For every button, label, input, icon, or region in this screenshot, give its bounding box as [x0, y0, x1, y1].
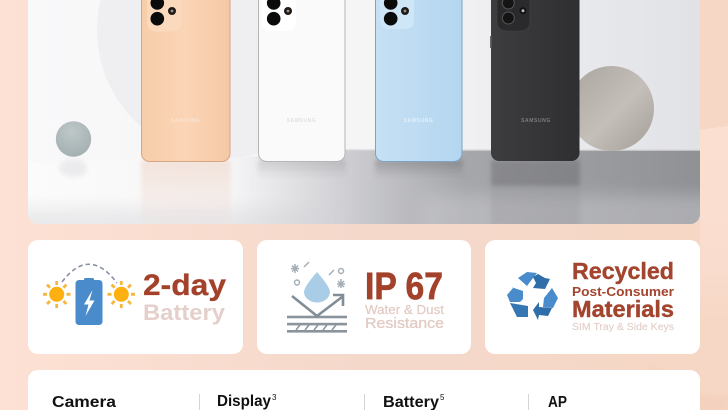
icon: water and dust resistance	[287, 262, 347, 333]
phone: black: SAMSUNG	[521, 118, 551, 124]
heading: IP 67: IP 67	[365, 266, 443, 308]
floor reflections	[141, 160, 580, 226]
floor	[28, 150, 700, 224]
footnote 5: 5	[440, 393, 445, 402]
label: Battery: Battery	[143, 300, 226, 325]
specs panel	[28, 370, 700, 410]
card: recycled materials	[485, 240, 700, 354]
phone: white: SAMSUNG	[287, 118, 316, 124]
icon: battery between two suns	[43, 264, 135, 325]
icon: recycling arrows	[507, 272, 558, 320]
phone: light blue	[376, 0, 462, 162]
backdrop circle	[97, 0, 141, 124]
phone: light blue: SAMSUNG	[404, 118, 433, 124]
large taupe sphere	[580, 66, 654, 151]
phone: peach	[142, 0, 230, 162]
heading: 2-day: 2-day	[143, 269, 226, 302]
label: Water & Dust: Water & Dust	[365, 303, 445, 317]
heading: Materials: Materials	[572, 296, 674, 322]
phone: white	[258, 0, 345, 162]
spec: Display: Display	[217, 393, 271, 410]
card: 2-day battery	[28, 240, 243, 354]
label: SIM Tray & Side Keys: SIM Tray & Side Keys	[572, 321, 674, 333]
small grey sphere	[56, 121, 91, 177]
phone: peach: SAMSUNG	[171, 118, 200, 124]
card: IP67	[257, 240, 471, 354]
product photo panel	[28, 0, 700, 224]
heading: Recycled: Recycled	[572, 258, 674, 284]
label: Post-Consumer: Post-Consumer	[572, 285, 674, 299]
label: Resistance: Resistance	[365, 316, 444, 332]
phone: black	[490, 0, 580, 161]
footnote 3: 3	[272, 393, 277, 402]
